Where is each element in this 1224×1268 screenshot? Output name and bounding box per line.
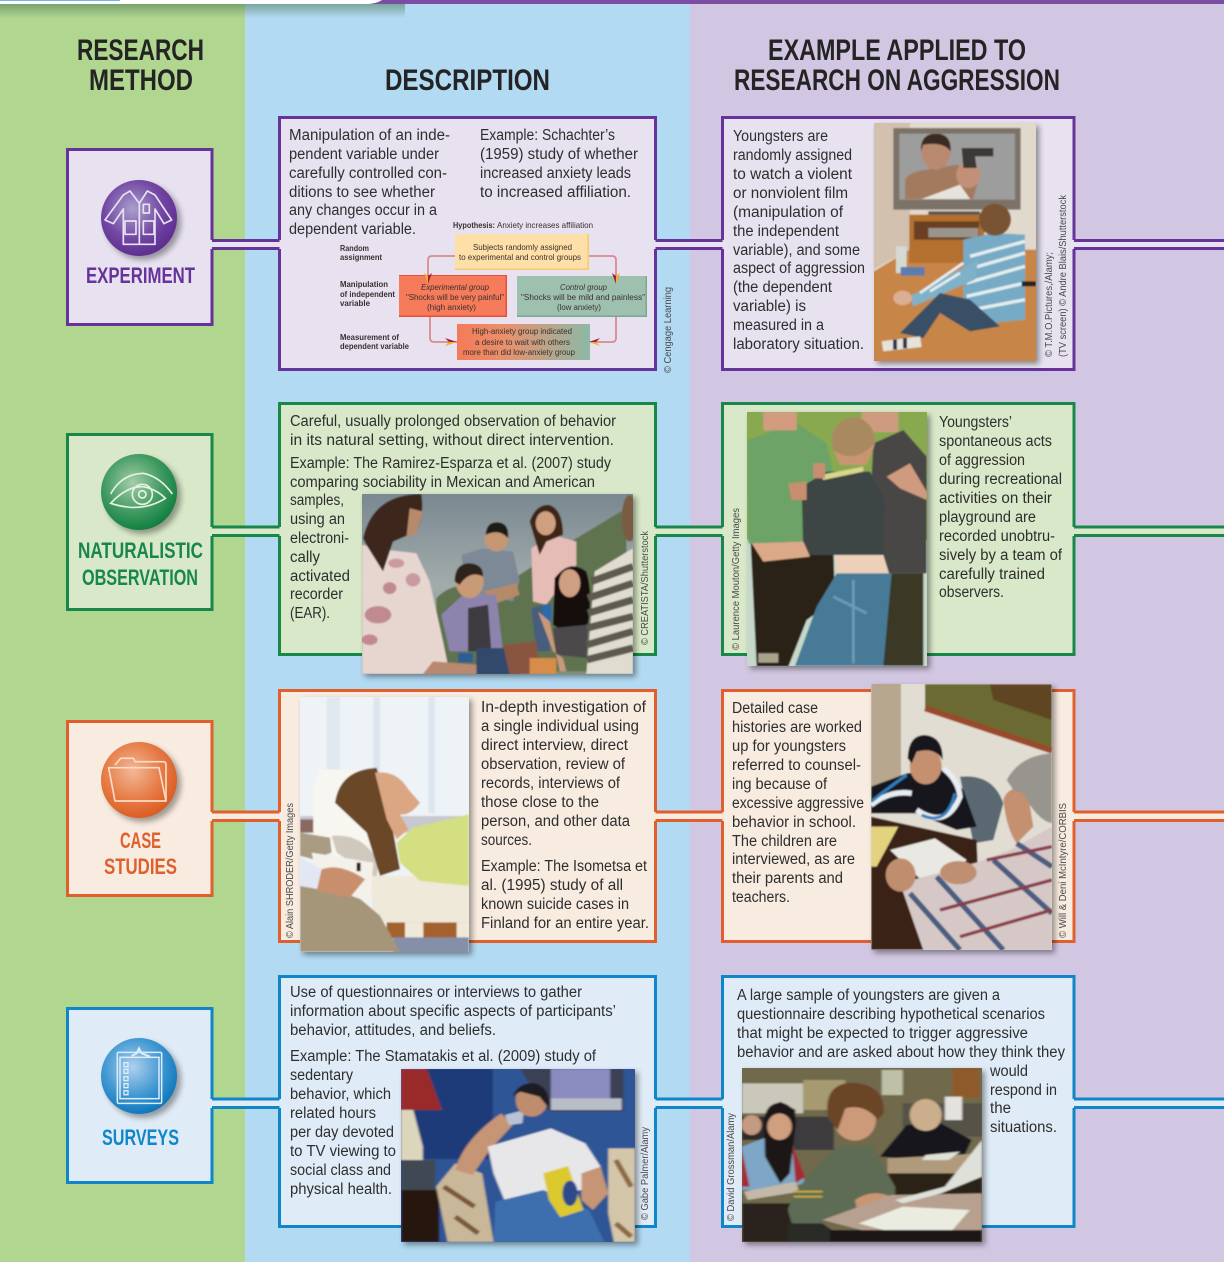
flow diagram: Schachter study: assignment — [340, 252, 382, 262]
photo: boys scuffling on playground — [720, 400, 953, 673]
text: survey definition and example: information about specific aspects of participants’ — [290, 1003, 616, 1020]
text: naturalistic application: recorded unobtru- — [939, 528, 1055, 545]
text: experiment definition — [289, 127, 450, 238]
flow diagram: Schachter study: a desire to wait with others — [475, 337, 570, 347]
top band — [0, 0, 1224, 18]
text: survey application: questionnaire describing hypothetical scenarios — [737, 1006, 1045, 1023]
heading: research method: METHOD — [89, 64, 193, 97]
text: survey definition and example — [290, 984, 616, 1198]
label: case studies: STUDIES — [104, 854, 177, 879]
label: naturalistic observation: OBSERVATION — [82, 565, 198, 590]
icon: lab coat — [101, 180, 181, 260]
text: experiment definition: ditions to see whether — [289, 184, 435, 201]
photo: students filling out questionnaires — [734, 1060, 1002, 1260]
heading: example applied to research on aggression: RESEARCH ON AGGRESSION — [734, 64, 1060, 97]
icon: clipboard — [101, 1038, 181, 1118]
text: naturalistic definition and example: samples, — [290, 492, 344, 509]
flow diagram: Schachter study: to experimental and control groups — [459, 252, 581, 262]
text: experiment application: aspect of aggression — [733, 260, 865, 277]
text: case application: The children are — [732, 833, 837, 850]
credit: TV photo — [1044, 194, 1069, 357]
text: experiment application: the independent — [733, 223, 840, 240]
flow diagram: Schachter study: "Shocks will be very painful" — [406, 292, 504, 302]
text: case definition and example: Example: The Isometsa et — [481, 858, 648, 875]
text: experiment application: to watch a violent — [733, 166, 853, 183]
text: experiment definition: carefully controlled con- — [289, 165, 447, 182]
text: case application: excessive aggressive — [732, 795, 864, 812]
label: surveys: SURVEYS — [102, 1125, 179, 1150]
text: naturalistic application: spontaneous acts — [939, 433, 1052, 450]
text: survey definition and example: to TV viewing to — [290, 1143, 396, 1160]
text: case definition and example: al. (1995) study of all — [481, 877, 623, 894]
credit: TV photo: (TV screen) © Andre Blais/Shutterstock — [1058, 194, 1069, 357]
flow diagram: Schachter study: Random — [340, 243, 369, 253]
flow diagram: Schachter study: High-anxiety group indicated — [472, 326, 572, 336]
text: case application: histories are worked — [732, 719, 862, 736]
text: experiment definition: Manipulation of an inde- — [289, 127, 450, 144]
text: survey definition and example: related hours — [290, 1105, 376, 1122]
column background: research method — [0, 0, 245, 1262]
panel: case connectors — [211, 812, 1224, 820]
text: experiment application: variable), and some — [733, 242, 860, 259]
text: naturalistic application: during recreational — [939, 471, 1062, 488]
text: case definition and example: sources. — [481, 832, 532, 849]
text: experiment example: increased anxiety leads — [480, 165, 631, 182]
text: naturalistic definition and example: Careful, usually prolonged observation of behavior — [290, 413, 616, 430]
credit: Laurence Mouton: © Laurence Mouton/Getty Images — [731, 508, 742, 650]
credit: Creatista: © CREATISTA/Shutterstock — [640, 530, 651, 645]
text: naturalistic definition and example: cally — [290, 549, 320, 566]
panel: survey method — [68, 1008, 212, 1182]
panel: naturalistic connectors — [211, 527, 1224, 536]
text: naturalistic definition and example: comparing sociability in Mexican and American — [290, 474, 595, 491]
text: experiment definition: dependent variable. — [289, 221, 416, 238]
panel: experiment connectors — [211, 240, 1224, 248]
icon: eye — [101, 454, 181, 534]
text: survey definition and example: behavior, attitudes, and beliefs. — [290, 1022, 496, 1039]
text: naturalistic application — [939, 414, 1063, 601]
text: experiment application: variable) is — [733, 298, 806, 315]
text: survey application: the — [990, 1100, 1011, 1117]
credit: Alain Shroder: © Alain SHRODER/Getty Images — [285, 803, 296, 938]
text: case definition and example: those close to the — [481, 794, 599, 811]
panel: naturalistic example — [720, 400, 1074, 673]
panel: experiment example — [722, 110, 1074, 376]
panel: case example — [722, 680, 1074, 953]
text: naturalistic application: carefully trained — [939, 566, 1045, 583]
heading: research method — [77, 34, 204, 97]
photo: group of young adults socializing — [350, 485, 650, 685]
text: experiment example: Example: Schachter’s — [480, 127, 615, 144]
panel: experiment description — [280, 118, 674, 373]
text: survey definition and example: social class and — [290, 1162, 391, 1179]
flow diagram: Schachter study: (low anxiety) — [557, 302, 601, 312]
text: naturalistic application: sively by a team of — [939, 547, 1063, 564]
text: survey definition and example: per day devoted — [290, 1124, 394, 1141]
text: case application: referred to counsel- — [732, 757, 861, 774]
text: experiment definition: pendent variable under — [289, 146, 439, 163]
photo: woman on therapist's couch — [280, 690, 480, 956]
text: naturalistic definition and example: in its natural setting, without direct intervention. — [290, 432, 614, 449]
text: naturalistic application: of aggression — [939, 452, 1025, 469]
label: case studies — [104, 828, 177, 879]
row: naturalistic observation — [68, 400, 1224, 685]
text: naturalistic definition and example: activated — [290, 568, 350, 585]
credit: TV photo: © T.M.O.Pictures,/Alamy; — [1044, 252, 1055, 357]
flow diagram: Schachter study: variable — [340, 298, 370, 308]
flow diagram: Schachter study: "Shocks will be mild and painless" — [521, 292, 645, 302]
credit: Will and Deni McIntyre: © Will & Deni McIntyre/CORBIS — [1058, 803, 1069, 938]
row: surveys — [68, 976, 1224, 1260]
panel: case method — [68, 722, 212, 896]
text: naturalistic application: playground are — [939, 509, 1036, 526]
text: case definition and example: In-depth investigation of — [481, 699, 647, 716]
label: naturalistic observation — [78, 538, 203, 590]
text: case application: up for youngsters — [732, 738, 846, 755]
text: case definition and example: observation, review of — [481, 756, 626, 773]
text: survey application: A large sample of youngsters are given a — [737, 987, 1000, 1004]
label: case studies: CASE — [120, 828, 161, 853]
flow diagram: Schachter study: Experimental group — [421, 282, 489, 292]
text: case application: Detailed case — [732, 700, 818, 717]
text: experiment example — [480, 127, 638, 201]
panel: naturalistic description — [280, 404, 656, 685]
flow diagram: Schachter study: more than did low-anxiety group — [463, 347, 575, 357]
photo: boy watching violent film on TV — [860, 110, 1060, 376]
photo: man watching TV with snacks — [390, 1060, 658, 1260]
label: experiment: EXPERIMENT — [86, 263, 195, 288]
text: case definition and example: direct interview, direct — [481, 737, 629, 754]
text: experiment definition: any changes occur in a — [289, 202, 437, 219]
panel: experiment method — [68, 150, 212, 324]
credit: David Grossman: © David Grossman/Alamy — [726, 1113, 737, 1221]
text: experiment application: Youngsters are — [733, 128, 828, 145]
heading: example applied to research on aggression: EXAMPLE APPLIED TO — [768, 34, 1026, 67]
panel: case description — [280, 690, 656, 956]
text: survey application: respond in — [990, 1082, 1057, 1099]
flow diagram: Schachter study: dependent variable — [340, 341, 409, 351]
text: survey definition and example: behavior, which — [290, 1086, 391, 1103]
text: naturalistic application: observers. — [939, 584, 1004, 601]
text: experiment application: measured in a — [733, 317, 824, 334]
text: case definition and example: records, interviews of — [481, 775, 621, 792]
credit: Cengage: © Cengage Learning — [663, 287, 674, 373]
text: case application: teachers. — [732, 889, 790, 906]
text: case application — [732, 700, 864, 906]
text: case definition and example: a single individual using — [481, 718, 639, 735]
text: naturalistic application: Youngsters’ — [939, 414, 1012, 431]
text: experiment application: randomly assigned — [733, 147, 852, 164]
text: case definition and example: known suicide cases in — [481, 896, 629, 913]
text: case application: ing because of — [732, 776, 828, 793]
flow diagram: Schachter study: Manipulation — [340, 279, 388, 289]
heading: research method: RESEARCH — [77, 34, 204, 67]
heading: example applied to research on aggression — [734, 34, 1060, 97]
text: naturalistic definition and example: Example: The Ramirez-Esparza et al. (2007) study — [290, 455, 611, 472]
text: experiment example: to increased affiliation. — [480, 184, 631, 201]
text: survey definition and example: sedentary — [290, 1067, 353, 1084]
text: survey definition and example: Example: The Stamatakis et al. (2009) study of — [290, 1048, 597, 1065]
text: experiment application: (manipulation of — [733, 204, 844, 221]
text: experiment application: or nonviolent film — [733, 185, 848, 202]
text: naturalistic definition and example — [290, 413, 616, 622]
row: experiment — [68, 110, 1224, 376]
text: naturalistic definition and example: using an — [290, 511, 345, 528]
text: survey definition and example: physical health. — [290, 1181, 392, 1198]
text: survey application — [737, 987, 1065, 1136]
row: case studies — [68, 680, 1224, 956]
panel: naturalistic method — [68, 434, 212, 610]
flow diagram: Schachter study: Subjects randomly assigned — [473, 242, 572, 252]
text: experiment application: (the dependent — [733, 279, 833, 296]
text: experiment application — [733, 128, 865, 353]
flow diagram: Schachter study: Measurement of — [340, 332, 399, 342]
flow diagram: Schachter study: of independent — [340, 289, 395, 299]
text: experiment application: laboratory situation. — [733, 336, 864, 353]
text: case application: behavior in school. — [732, 814, 856, 831]
text: survey application: situations. — [990, 1119, 1057, 1136]
text: case application: interviewed, as are — [732, 851, 855, 868]
panel: survey description — [280, 976, 658, 1260]
text: experiment example: (1959) study of whether — [480, 146, 638, 163]
flow diagram: Schachter study — [340, 220, 647, 360]
photo: counselor interviewing boy — [860, 680, 1060, 953]
heading: description: DESCRIPTION — [385, 64, 550, 97]
text: case definition and example: person, and other data — [481, 813, 630, 830]
text: case application: their parents and — [732, 870, 843, 887]
flow diagram: Schachter study: Control group — [560, 282, 607, 292]
text: naturalistic definition and example: electroni- — [290, 530, 349, 547]
text: survey application: would — [989, 1063, 1028, 1080]
credit: Gabe Palmer: © Gabe Palmer/Alamy — [640, 1127, 651, 1220]
panel: survey example — [722, 976, 1074, 1260]
flow diagram: Schachter study: Hypothesis: — [453, 220, 495, 230]
text: survey application: that might be expected to trigger aggressive — [737, 1025, 1028, 1042]
column background: example — [690, 0, 1224, 1262]
text: case definition and example — [481, 699, 649, 932]
text: survey definition and example: Use of questionnaires or interviews to gather — [290, 984, 582, 1001]
text: case definition and example: Finland for an entire year. — [481, 915, 649, 932]
flow diagram: Schachter study: Anxiety increases affiliation — [497, 220, 593, 230]
panel: survey connectors — [211, 1099, 1224, 1108]
icon: folder — [101, 742, 181, 822]
column background: description — [245, 0, 690, 1262]
text: naturalistic definition and example: (EAR). — [290, 605, 330, 622]
text: survey application: behavior and are asked about how they think they — [737, 1044, 1065, 1061]
text: naturalistic application: activities on their — [939, 490, 1052, 507]
flow diagram: Schachter study: (high anxiety) — [427, 302, 476, 312]
label: naturalistic observation: NATURALISTIC — [78, 538, 203, 563]
text: naturalistic definition and example: recorder — [290, 586, 343, 603]
